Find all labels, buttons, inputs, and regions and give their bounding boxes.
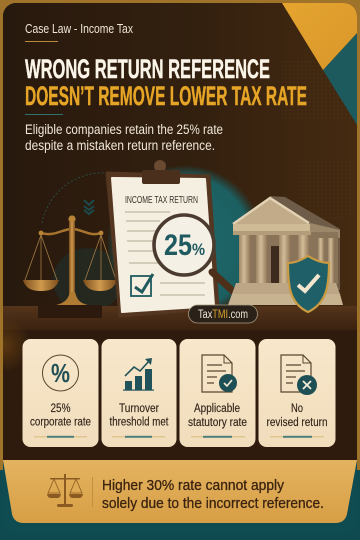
icon: magnifying glass — [154, 215, 247, 304]
card: no revised return: revised return — [266, 417, 328, 429]
lower brown band — [3, 330, 357, 460]
subtitle: despite a mistaken return reference. — [25, 138, 215, 153]
card: no revised return: No — [291, 403, 303, 415]
eyebrow label: Case Law - Income Tax — [25, 22, 134, 36]
card: 25% corporate rate — [22, 339, 98, 447]
icon: balance scale — [23, 215, 117, 318]
card: turnover threshold met — [102, 339, 176, 447]
logo pill — [188, 305, 258, 323]
card: 25% corporate rate: corporate rate — [30, 416, 91, 428]
subtitle: Eligible companies retain the 25% rate — [25, 122, 223, 137]
card: applicable statutory rate — [180, 339, 256, 447]
card: 25% corporate rate: 25% — [50, 403, 70, 415]
teal glow — [107, 165, 263, 321]
card: applicable statutory rate: Applicable — [194, 403, 240, 415]
icon: document with check — [202, 355, 237, 392]
clipboard — [107, 160, 218, 316]
bottom callout banner — [3, 460, 357, 523]
card: no revised return — [258, 339, 336, 447]
card: turnover threshold met: Turnover — [119, 403, 159, 415]
card: applicable statutory rate: statutory rate — [188, 417, 247, 429]
icon: scales — [47, 474, 83, 507]
dashed arc — [42, 173, 107, 223]
subtitle — [25, 122, 223, 153]
clipboard heading: INCOME TAX RETURN — [125, 194, 198, 206]
illustration scene — [3, 160, 357, 330]
card: turnover threshold met: threshold met — [110, 416, 169, 428]
icon: magnifying glass: % — [192, 240, 205, 259]
logo pill: TaxTMI.com — [198, 309, 248, 321]
icon: bar chart with arrow — [123, 358, 154, 391]
icon: checkbox — [131, 274, 153, 296]
title — [25, 54, 307, 111]
icon: percent circle: % — [51, 358, 70, 388]
callout text: solely due to the incorrect reference. — [102, 496, 324, 512]
callout text — [102, 478, 324, 512]
icon: classical building — [228, 196, 343, 305]
icon: document with cross — [281, 355, 317, 395]
icon: shield check — [288, 256, 329, 312]
corner triangles — [282, 3, 357, 125]
icon: magnifying glass: 25 — [164, 229, 192, 262]
floor — [3, 306, 357, 330]
callout text: Higher 30% rate cannot apply — [102, 478, 285, 494]
